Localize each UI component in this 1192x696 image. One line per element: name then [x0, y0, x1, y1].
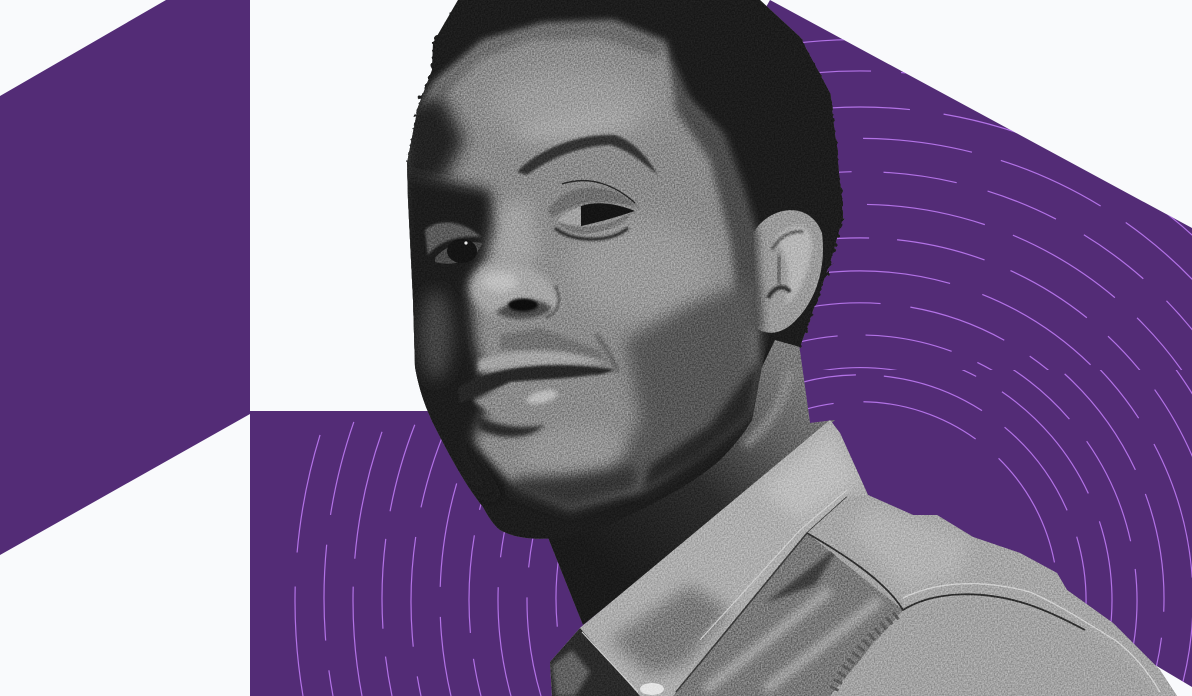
shirt: collar bright: [764, 436, 862, 518]
shirt: chest dark patch: [766, 550, 836, 604]
panel: right purple chevron: [600, 0, 1192, 696]
arcs: upper right: [802, 39, 1192, 370]
face: lower lip highlight: [525, 387, 559, 407]
person: face: [400, 22, 762, 512]
person: hair and head silhouette: [407, 0, 843, 539]
person: neck: [545, 330, 835, 625]
face: right eye white: [558, 206, 585, 225]
person: shirt: [540, 410, 1190, 696]
shirt: yoke: [807, 495, 1177, 696]
panel: left purple parallelogram: [0, 0, 250, 555]
face: chin light: [524, 430, 627, 468]
face: under lip shadow: [475, 415, 545, 437]
face: brow ridge highlight: [519, 112, 626, 144]
shirt: sleeve seam stitches: [834, 615, 897, 690]
shirt: collar worn dark: [610, 585, 730, 675]
face: right lid crease: [562, 181, 635, 203]
face: cheek highlight: [565, 220, 715, 320]
face: left catchlight: [464, 241, 468, 245]
face: right iris: [581, 203, 635, 226]
face: left iris: [447, 239, 477, 263]
person: [400, 0, 1190, 696]
face: beard lower dark: [640, 360, 760, 492]
person: neck fold: [745, 370, 790, 445]
panel: lower centre purple block: [250, 411, 620, 696]
face: nose bridge highlight: [490, 200, 540, 270]
face: upper lip: [478, 351, 610, 372]
face: brow-to-eye plane: [525, 145, 655, 205]
face: skin base: [400, 22, 757, 508]
face: right lower lid: [555, 228, 628, 239]
face: hairline shadow: [433, 22, 665, 100]
face: beard cheek stubble: [610, 280, 760, 490]
face: nostril: [508, 298, 538, 312]
face: left dark side: [400, 170, 500, 500]
shirt: inner collar dark: [548, 628, 645, 696]
face: left eye: [435, 242, 482, 264]
face: right eyebrow: [517, 135, 658, 175]
shirt: collar stitch: [582, 490, 847, 692]
shirt: chest panel: [673, 533, 903, 696]
shirt: button: [640, 683, 664, 695]
face: moustache: [500, 328, 612, 370]
face: forehead highlight: [490, 70, 660, 140]
arcs: lower band: [294, 370, 1192, 696]
face: mouth band: [458, 365, 615, 404]
face: nose tip: [470, 261, 560, 319]
shirt: sleeve base: [540, 410, 1190, 696]
face: nose underside shadow: [495, 300, 552, 319]
shirt: yoke highlight: [856, 509, 964, 586]
face: left lid: [425, 223, 481, 255]
shirt: collar fold line: [676, 497, 847, 692]
face: right lower lid band: [558, 212, 632, 234]
shirt: collar: [580, 420, 868, 696]
face: lower lip: [473, 375, 595, 420]
shirt: yoke seam: [807, 533, 1085, 630]
face: nose wing crease: [545, 285, 559, 318]
shirt: inner collar highlight: [552, 650, 590, 696]
person: hair texture edge: [407, 5, 843, 347]
shirt: chest light streaks: [705, 590, 880, 690]
face: smile crease: [596, 335, 618, 372]
face: left forehead shade: [400, 95, 465, 185]
person: ear: [753, 210, 823, 333]
face: right eyelid: [548, 187, 640, 218]
shirt: yoke stitch: [903, 584, 1160, 692]
shirt: sleeve panel: [860, 630, 886, 660]
face: sideburn stubble: [672, 60, 762, 330]
face: nose tip highlight: [482, 272, 518, 292]
face: chin stubble: [510, 465, 640, 512]
face: left cheek glow: [420, 291, 452, 379]
